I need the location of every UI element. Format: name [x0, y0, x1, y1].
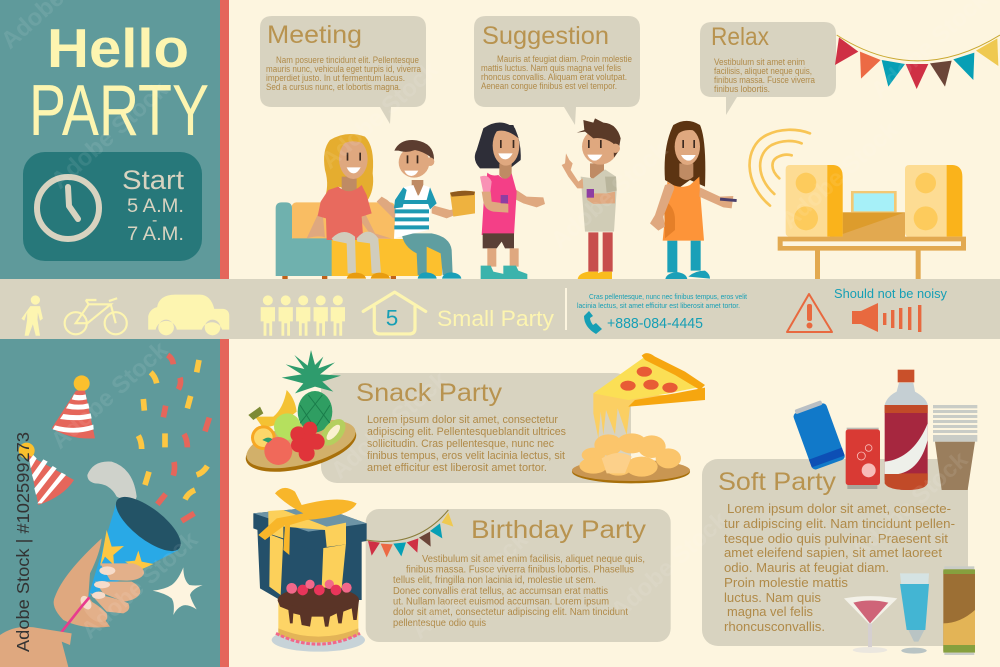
icon: walking person [21, 295, 43, 336]
speech bubble: Suggestion: rhoncus convallis. Aliquam erat volutpat. [481, 72, 627, 82]
panel: Soft Party: odio. Mauris at feugiat diam. [724, 561, 889, 575]
speech bubble: Meeting: Sed a cursus nunc, et lobortis magna. [266, 82, 401, 92]
title: PARTY [29, 71, 209, 151]
speech bubble: Suggestion: mattis luctus. Nam quis magna vel felis [481, 63, 621, 73]
panel: Snack Party: adipiscing elit. Pellentesqueblandit ultrices [367, 426, 566, 438]
start time text: 7 A.M. [127, 224, 184, 245]
Birthday Party text: pellentesque odio quis [393, 618, 486, 629]
divider [565, 288, 567, 330]
stereo system [786, 165, 962, 240]
sound waves [750, 130, 810, 206]
hand holding popper [0, 538, 144, 667]
red can [846, 428, 880, 489]
panel: Soft Party: Soft Party [718, 468, 837, 496]
icons: transport and guests [21, 292, 426, 336]
table [778, 237, 966, 279]
speech bubble: Meeting: Meeting [267, 21, 362, 49]
watermark text: Adobe Stock [76, 526, 204, 644]
contact block [577, 292, 747, 334]
illustration: gift and cake [253, 488, 671, 652]
party hat upper [52, 375, 95, 439]
panel: Soft Party: magna vel felis [727, 605, 813, 619]
small party label: Small Party [437, 306, 554, 331]
panel: Soft Party: luctus. Nam quis [724, 591, 821, 605]
panel: Snack Party: Lorem ipsum dolor sit amet, consectetur [367, 414, 558, 426]
speech bubble: Meeting: Nam posuere tincidunt elit. Pellentesque [276, 55, 419, 65]
speech bubble: Meeting [260, 16, 426, 124]
start time text [122, 165, 185, 245]
burst star [153, 567, 203, 615]
panel: Soft Party: tur adipiscing elit. Nam tincidunt pellen- [724, 517, 955, 531]
illustration: sofa and people [276, 118, 621, 279]
blue glass [900, 573, 929, 654]
popper cone [88, 488, 189, 597]
panel: Soft Party: Proin molestie mattis [724, 576, 848, 590]
panel: left teal column [0, 0, 220, 667]
watermark text: Adobe Stock [316, 56, 444, 174]
gift box [253, 488, 367, 600]
noise warning [834, 286, 947, 332]
contact block: lacinia lectus, sit amet efficitur est liberosit amet tortor. [577, 301, 740, 310]
watermark text: Adobe Stock [46, 336, 174, 454]
title [29, 17, 209, 151]
speech bubble: Suggestion: Suggestion [482, 22, 609, 50]
sofa [276, 202, 442, 279]
adobe stock vertical caption: Adobe Stock | #102599273 [13, 432, 33, 652]
contact block: Cras pellentesque, nunc nec finibus tempus, eros velit [589, 292, 747, 301]
speech bubble: Relax [700, 22, 836, 115]
stacked cups [933, 405, 977, 490]
icon: five people [261, 295, 345, 336]
boy pointing [562, 118, 621, 279]
illustration: fruit plate and pizza [241, 350, 705, 483]
watermark text: Adobe Stock [776, 116, 904, 234]
speech bubble: Relax: Relax [711, 23, 769, 51]
watermark text: Adobe Stock [546, 136, 674, 254]
Birthday Party text: ut. Nullam laoreet euismod accumsan. Lorem ipsum [393, 596, 609, 608]
watermark text: Adobe Stock [326, 366, 454, 484]
speech bubble: Suggestion: Mauris at feugiat diam. Proin molestie [497, 54, 632, 64]
Birthday Party text [393, 516, 647, 629]
panel: Soft Party [702, 459, 968, 646]
party hat lower [19, 443, 74, 505]
red divider stripe [220, 0, 229, 667]
warning icon [787, 294, 832, 332]
start time text: Start [122, 165, 185, 195]
panel: Snack Party: Snack Party [356, 379, 503, 407]
woman on sofa [307, 134, 392, 279]
girl with remote [650, 121, 737, 279]
panel: Soft Party: tesque odio quis pulvinar. Praesent sit [724, 532, 949, 546]
panel: Birthday Party background [366, 509, 671, 642]
streamer paper [87, 461, 137, 505]
panel: Soft Party: rhoncusconvallis. [724, 620, 825, 634]
green can [943, 566, 975, 655]
start time text: - [152, 212, 157, 229]
speech bubble: Suggestion [474, 16, 640, 125]
Birthday Party text: Donec convallis erat tellus, ac accumsan erat mattis [393, 586, 608, 597]
start time text: 5 A.M. [127, 196, 184, 217]
icon: house with number 5: 5 [386, 305, 398, 330]
martini glass [844, 596, 897, 653]
icon: phone [584, 311, 602, 334]
icon: bicycle [65, 298, 127, 334]
cake [272, 580, 365, 652]
speech bubble: Meeting: mauris nunc, vehicula eget turpis id, viverra [266, 64, 421, 74]
fruit plate [241, 350, 361, 481]
illustration: relaxing girl and stereo [650, 35, 1000, 279]
panel: Snack Party: amet efficitur est liberosit amet tortor. [367, 462, 547, 474]
icon: speaker volume [852, 303, 921, 332]
panel: Soft Party: Lorem ipsum dolor sit amet, consecte- [727, 502, 951, 516]
illustration: drinks [791, 370, 977, 655]
bunting flags [835, 35, 1000, 89]
Birthday Party text: dolor sit amet, consectetur adipiscing elit. Nam tincidunt [393, 607, 628, 618]
speech bubble: Suggestion: Aenean congue finibus est vel tempor. [481, 81, 617, 91]
speech bubble: Relax: Vestibulum sit amet enim [714, 57, 805, 67]
panel: Snack Party: finibus tempus, eros velit lacinia lectus, sit [367, 450, 565, 462]
watermark text: Adobe Stock [46, 76, 174, 194]
girl in pink dress [475, 122, 545, 279]
Birthday Party text: tellus elit, fringilla non lacinia id, molestie ut sem. [393, 575, 596, 586]
band: info strip [0, 279, 1000, 339]
speech bubble: Relax: finibus massa. Fusce viverra [714, 75, 815, 85]
contact block: +888-084-4445 [607, 316, 703, 332]
speech bubble: Relax: finibus lobortis. [714, 84, 770, 94]
illustration: party popper, hats, confetti [0, 355, 209, 667]
watermark text: Adobe Stock [846, 446, 974, 564]
watermark text: Adobe Stock [406, 526, 534, 644]
panel: Snack Party [321, 373, 631, 483]
pizza and chips [572, 353, 705, 483]
Birthday Party text: Vestibulum sit amet enim facilisis, aliquet neque quis, [422, 554, 645, 565]
confetti [138, 355, 209, 521]
soda bottle [885, 370, 928, 490]
boy with chips [377, 140, 475, 279]
icon: car [148, 295, 229, 335]
watermark text: Adobe Stock [606, 506, 734, 624]
Birthday Party text: Birthday Party [471, 516, 647, 544]
speech bubble: Meeting: imperdiet justo. In ut fermentum lacus. [266, 73, 405, 83]
blue can [791, 399, 846, 471]
speech bubble: Relax: facilisis, aliquet neque quis, [714, 66, 812, 76]
panel: start time [23, 152, 202, 261]
icon: house with number 5 [363, 292, 426, 334]
icon: clock [37, 177, 99, 239]
Birthday Party text: finibus massa. Fusce viverra finibus lobortis. Phasellus [406, 564, 634, 576]
small bunting [366, 510, 453, 557]
panel: Snack Party: sollicitudin. Cras pellentesque, nunc nec [367, 438, 554, 450]
noise warning: Should not be noisy [834, 286, 947, 301]
panel: Soft Party: amet eleifend sapien, sit amet laoreet [724, 546, 943, 560]
title: Hello [47, 17, 189, 79]
